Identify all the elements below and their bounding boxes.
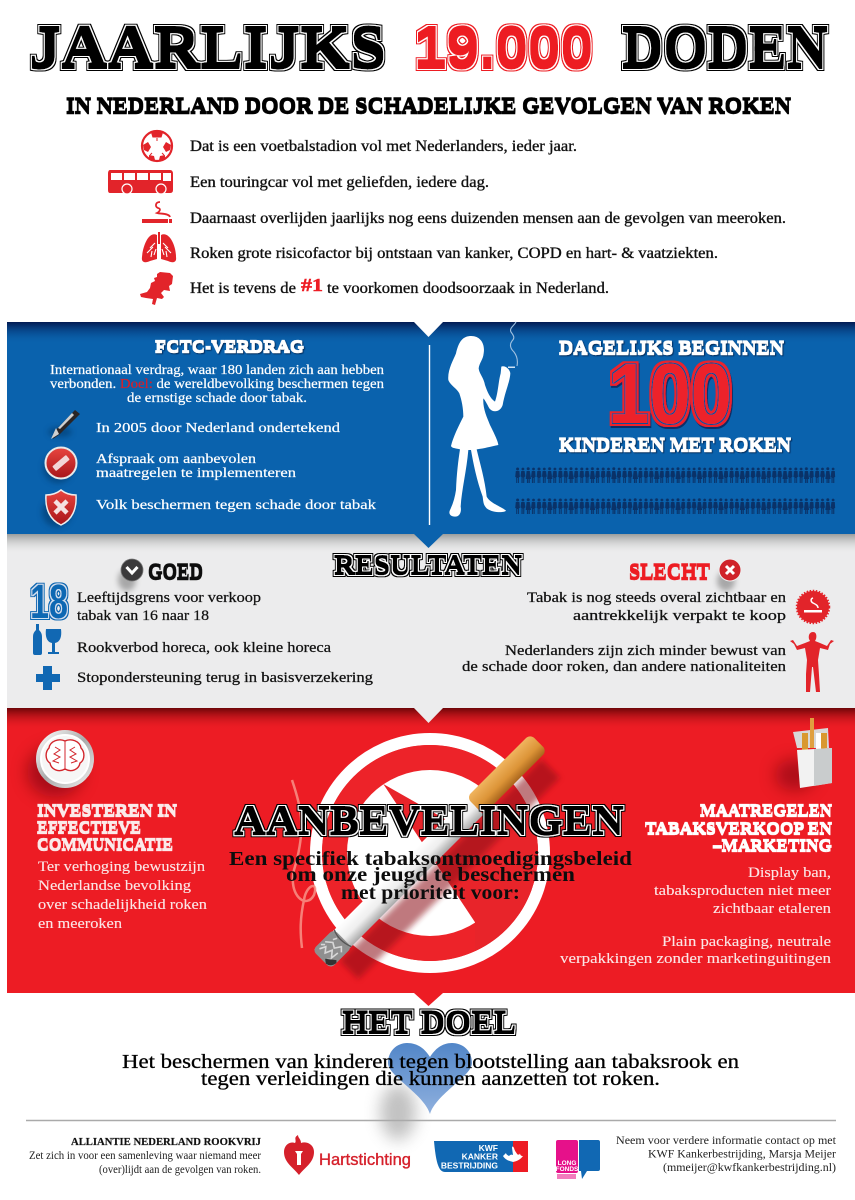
icon: bottle and glass	[33, 624, 61, 655]
item: less aware	[462, 643, 787, 675]
footer: alliance: ALLIANTIE NEDERLAND ROOKVRIJ	[71, 1137, 261, 1148]
logo: Hartstichting: Hartstichting	[319, 1150, 411, 1169]
item: quit support: Stopondersteuning terug in basisverzekering	[77, 670, 373, 686]
title	[29, 14, 828, 80]
item: tobacco visible	[527, 590, 787, 624]
number icon: 18: 18	[30, 576, 68, 629]
icon: shield	[42, 490, 76, 527]
fact: number one: Het is tevens de	[190, 280, 296, 297]
icon: cigarette	[142, 202, 172, 223]
footer: contact: (mmeijer@kwfkankerbestrijding.nl)	[663, 1162, 836, 1174]
intro text: verbonden. Doel: de wereldbevolking beschermen tegen	[50, 377, 384, 392]
fact: number one: te voorkomen doodsoorzaak in Nederland.	[327, 280, 609, 297]
pictogram rows: 100 children	[515, 467, 836, 514]
item: recommended measures	[96, 452, 296, 481]
text: communication: en meeroken	[38, 916, 123, 932]
icon: pen	[48, 410, 80, 439]
item: age limit: Leeftijdsgrens voor verkoop	[77, 590, 261, 606]
smoke	[292, 780, 315, 948]
subtitle: IN NEDERLAND DOOR DE SCHADELIJKE GEVOLGEN VAN ROKEN	[66, 93, 791, 118]
number: 100: 100	[608, 347, 732, 442]
panel: recommendations	[7, 708, 855, 993]
label: good	[118, 559, 203, 591]
item: less aware: de schade door roken, dan andere nationaliteiten	[462, 659, 787, 675]
fact: secondhand smoke: Daarnaast overlijden jaarlijks nog eens duizenden mensen aan de gevolgen van meeroken.	[190, 210, 786, 227]
heading: FCTC: FCTC-VERDRAG	[155, 337, 304, 356]
footer: alliance	[29, 1137, 261, 1176]
item: less aware: Nederlanders zijn zich minder bewust van	[505, 643, 787, 659]
item: age limit	[77, 590, 261, 624]
heading: measures	[645, 801, 833, 855]
item: horeca ban: Rookverbod horeca, ook kleine horeca	[77, 640, 332, 656]
item: tobacco visible: aantrekkelijk verpakt te koop	[573, 608, 786, 624]
heading: recommendations: AANBEVELINGEN	[234, 797, 624, 843]
logo: KWF	[434, 1141, 528, 1172]
heading: daily: DAGELIJKS BEGINNEN	[559, 338, 784, 359]
footer: contact: Neem voor verdere informatie contact op met	[616, 1135, 837, 1147]
text: communication: Ter verhoging bewustzijn	[38, 859, 206, 875]
item: age limit: tabak van 16 naar 18	[77, 608, 209, 624]
icon: map of the Netherlands	[140, 272, 173, 305]
panel: blue	[7, 322, 855, 534]
item: protect people: Volk beschermen tegen schade door tabak	[96, 498, 376, 513]
intro text: de ernstige schade door tabak.	[127, 391, 307, 406]
panel: results	[7, 534, 855, 708]
text: communication: over schadelijkheid roken	[38, 897, 208, 913]
text: goal: Het beschermen van kinderen tegen blootstelling aan tabaksrook en	[122, 1051, 739, 1073]
intro text: Internationaal verdrag, waar 180 landen zich aan hebben	[50, 363, 384, 378]
footer: contact: KWF Kankerbestrijding, Marsja Meijer	[648, 1148, 836, 1160]
text: communication	[38, 859, 208, 932]
text: policy: met prioriteit voor:	[341, 882, 520, 904]
title: JAARLIJKS	[29, 14, 386, 80]
icon: shrugging man	[790, 632, 834, 692]
pointer: red	[414, 993, 443, 1006]
heading: results: RESULTATEN	[334, 550, 523, 580]
heading: measures: MAATREGELEN	[700, 801, 833, 820]
icon: cigarette badge	[797, 591, 829, 623]
footer: alliance: (over)lijdt aan de gevolgen van roken.	[99, 1164, 261, 1176]
facts list	[108, 131, 786, 305]
icon: coach	[108, 170, 173, 194]
text: measures: Display ban,	[748, 865, 831, 881]
text: measures: verpakkingen zonder marketinguitingen	[560, 951, 832, 967]
item: recommended measures: maatregelen te implementeren	[96, 466, 296, 481]
label: good: GOED	[148, 559, 203, 584]
text: policy: Een specifiek tabaksontmoedigingsbeleid	[229, 848, 632, 870]
text: measures: tabaksproducten niet meer	[654, 883, 831, 899]
heart with shadow	[380, 1043, 472, 1140]
icon: football	[142, 131, 172, 161]
text: goal	[122, 1051, 739, 1090]
icon: brain	[27, 732, 92, 797]
fact: stadium: Dat is een voetbalstadion vol met Nederlanders, ieder jaar.	[190, 138, 577, 155]
logo: Longfonds: LONG	[558, 1160, 576, 1167]
logo: Hartstichting	[284, 1135, 411, 1175]
footer: contact	[616, 1135, 837, 1174]
text: communication: Nederlandse bevolking	[38, 878, 192, 894]
fact: diseases: Roken grote risicofactor bij ontstaan van kanker, COPD en hart- & vaatziekten.	[190, 245, 718, 262]
logo: KWF: KANKER	[462, 1152, 498, 1162]
heading: goal: HET DOEL	[342, 1005, 516, 1041]
text: measures: Plain packaging, neutrale	[662, 934, 831, 950]
fact: number one	[190, 275, 609, 297]
item: recommended measures: Afspraak om aanbevolen	[96, 452, 256, 467]
label: bad: SLECHT	[629, 559, 710, 584]
title: DODEN	[622, 14, 828, 80]
label: bad	[629, 559, 741, 591]
icon: cigarette pack	[775, 718, 832, 791]
logo: Longfonds	[556, 1140, 600, 1179]
text: measures	[560, 865, 832, 967]
heading: communication: EFFECTIEVE	[37, 818, 141, 837]
heading: communication: INVESTEREN IN	[37, 801, 178, 820]
cigarette	[312, 733, 567, 988]
logo: Longfonds: FONDS	[556, 1166, 579, 1173]
fact: number one: #1	[301, 275, 323, 295]
footer: alliance: Zet zich in voor een samenleving waar niemand meer	[29, 1150, 261, 1162]
title: 19.000	[414, 16, 593, 80]
text: measures: zichtbaar etaleren	[713, 901, 832, 917]
icon: plus	[36, 666, 60, 690]
icon: lungs	[142, 232, 176, 262]
fact: coach: Een touringcar vol met geliefden, iedere dag.	[190, 174, 489, 191]
heading: children: KINDEREN MET ROKEN	[559, 435, 791, 456]
intro text	[50, 363, 384, 406]
text: goal: tegen verleidingen die kunnen aanzetten tot roken.	[201, 1068, 660, 1090]
logo: KWF: KWF	[479, 1143, 498, 1153]
heading: measures: TABAKSVERKOOP EN	[645, 819, 833, 838]
item: signed: In 2005 door Nederland ondertekend	[96, 421, 340, 436]
silhouette: smoking girl	[448, 322, 517, 517]
item: tobacco visible: Tabak is nog steeds overal zichtbaar en	[527, 590, 787, 606]
text: policy: om onze jeugd te beschermen	[286, 864, 575, 886]
heading: communication	[37, 801, 178, 854]
heading: communication: COMMUNICATIE	[37, 835, 173, 854]
text: policy	[229, 848, 632, 904]
heading: measures: –MARKETING	[712, 836, 832, 855]
no-smoking sign with cigarette	[292, 733, 570, 988]
logo: KWF: BESTRIJDING	[441, 1160, 498, 1170]
icon: no-entry	[43, 448, 76, 483]
